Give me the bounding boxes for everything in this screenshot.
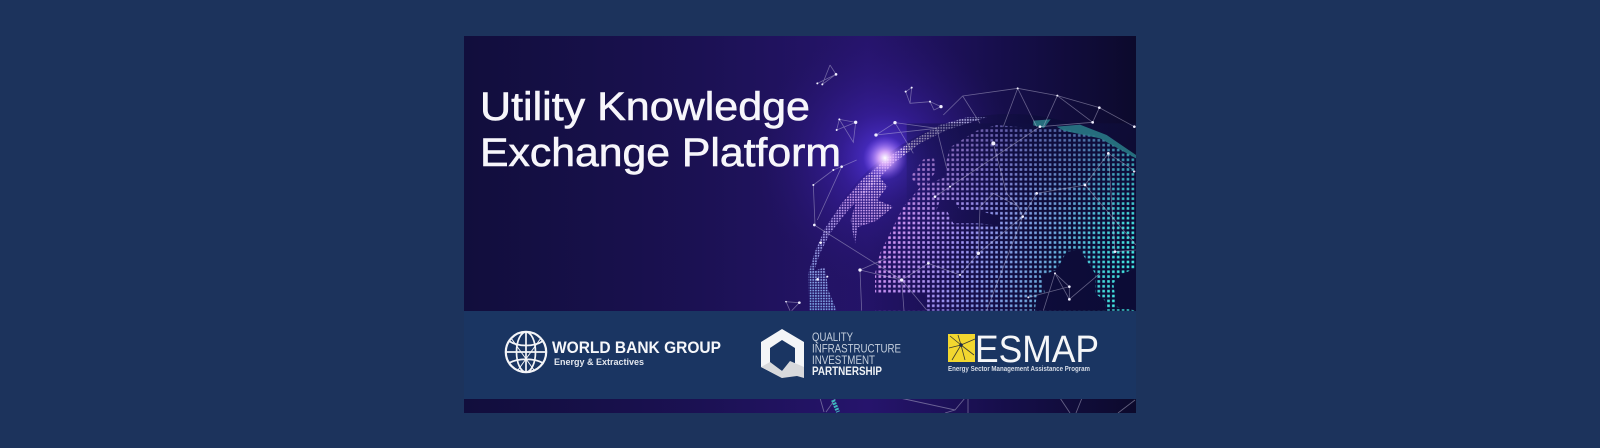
icon: yellow square with spark <box>948 334 975 362</box>
World Bank wordmark <box>552 339 721 367</box>
QIIP wordmark: QUALITY <box>812 331 853 344</box>
title: Exchange Platform <box>480 131 841 175</box>
ESMAP wordmark: ESMAP <box>975 329 1099 371</box>
World Bank wordmark: WORLD BANK GROUP <box>552 339 721 357</box>
limb dotted landmass <box>808 117 986 310</box>
network lines <box>786 65 1136 311</box>
partner logo band <box>464 311 1136 399</box>
panel: hero image <box>464 28 1147 413</box>
main dotted landmass <box>875 125 1134 311</box>
QIIP wordmark: INFRASTRUCTURE <box>812 342 901 356</box>
infographic banner <box>464 36 1136 413</box>
World Bank wordmark: Energy & Extractives <box>554 357 644 367</box>
title: Utility Knowledge <box>480 85 810 129</box>
bottom strip network fragments <box>820 398 1135 413</box>
QIIP wordmark: INVESTMENT <box>812 354 875 367</box>
title <box>480 85 841 175</box>
QIIP wordmark <box>812 331 901 378</box>
globe <box>780 60 1147 313</box>
land shading <box>906 123 1136 210</box>
logo: ESMAP <box>948 329 1099 373</box>
sun glow <box>786 62 980 250</box>
network nodes <box>785 73 1136 304</box>
teal northern coast <box>1033 119 1136 158</box>
icon: World Bank globe <box>506 332 546 372</box>
logo: World Bank Group <box>506 332 721 372</box>
icon: Q hexagon <box>761 329 804 378</box>
sun flare core <box>865 138 906 178</box>
ESMAP tagline: Energy Sector Management Assistance Program <box>948 364 1090 373</box>
QIIP wordmark: PARTNERSHIP <box>812 365 882 378</box>
logo: Quality Infrastructure Investment Partnership <box>761 329 901 378</box>
